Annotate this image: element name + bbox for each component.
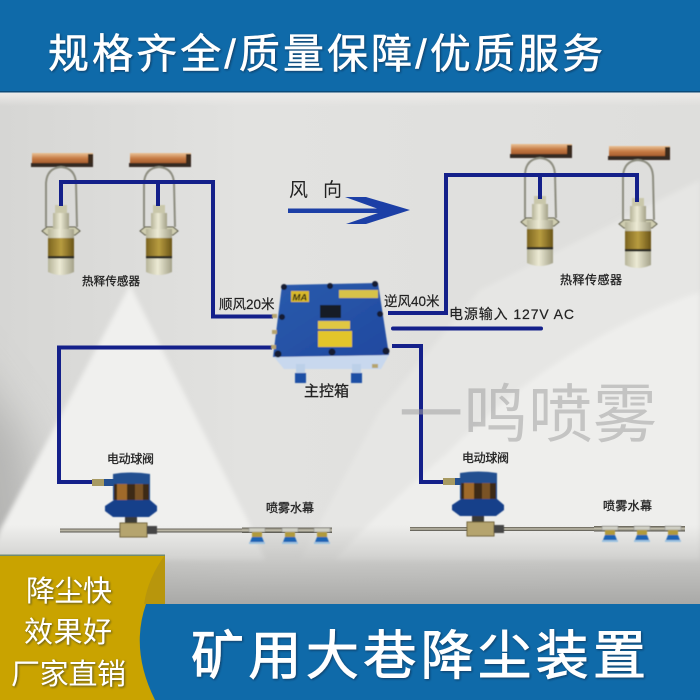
icon: left nozzle 2 <box>282 528 298 544</box>
text: dust falls fast: 降尘快 <box>26 575 112 608</box>
panel: main control box <box>271 281 390 383</box>
icon: left sensor 1 <box>31 153 93 275</box>
wire: main box to right valve <box>392 346 444 482</box>
heading: product title: 矿用大巷降尘装置 <box>191 627 646 686</box>
heading: banner slogan: 规格齐全/质量保障/优质服务 <box>48 31 603 77</box>
label: downwind 20m: 顺风20米 <box>219 297 275 312</box>
label: main control box: 主控箱 <box>304 383 349 400</box>
icon: left nozzle 1 <box>249 528 265 544</box>
label: upwind 40m: 逆风40米 <box>384 294 440 309</box>
panel: top banner <box>0 0 700 92</box>
icon: right sensor 2 <box>608 146 670 268</box>
label: left valve: 电动球阀 <box>107 452 154 466</box>
label: power input: 电源输入 127V AC <box>449 306 574 322</box>
text: factory direct: 厂家直销 <box>11 658 126 691</box>
icon: right nozzle 2 <box>634 526 650 542</box>
label: left sensors: 热释传感器 <box>82 274 140 288</box>
panel: bottom title bar <box>140 604 700 700</box>
icon: right valve <box>443 472 504 536</box>
wire: main box to left valve <box>59 348 272 482</box>
label: left water curtain: 喷雾水幕 <box>266 501 314 515</box>
arrow: wind direction <box>288 179 410 224</box>
watermark: 一鸣喷雾 <box>399 379 657 451</box>
text: good effect: 效果好 <box>24 616 112 649</box>
label: right valve: 电动球阀 <box>462 451 509 465</box>
label: wind direction: 风向 <box>289 179 357 201</box>
wire: power input <box>393 326 541 330</box>
wires: left sensors to main box <box>61 182 273 316</box>
label: right sensors: 热释传感器 <box>560 272 622 287</box>
pipe: left spray line <box>60 528 332 533</box>
icon: right nozzle 1 <box>602 526 618 542</box>
panel: diagram background <box>0 92 700 605</box>
label: right water curtain: 喷雾水幕 <box>603 499 652 513</box>
pipe: right spray line <box>410 526 685 532</box>
icon: right nozzle 3 <box>665 526 681 542</box>
icon: left valve <box>92 472 157 537</box>
panel: yellow feature tag <box>0 554 175 700</box>
icon: right sensor 1 <box>510 144 572 266</box>
panel: main control box: MA <box>292 292 307 304</box>
wires: right sensors to main box <box>388 175 637 313</box>
icon: left sensor 2 <box>129 153 191 275</box>
icon: left nozzle 3 <box>314 528 330 544</box>
